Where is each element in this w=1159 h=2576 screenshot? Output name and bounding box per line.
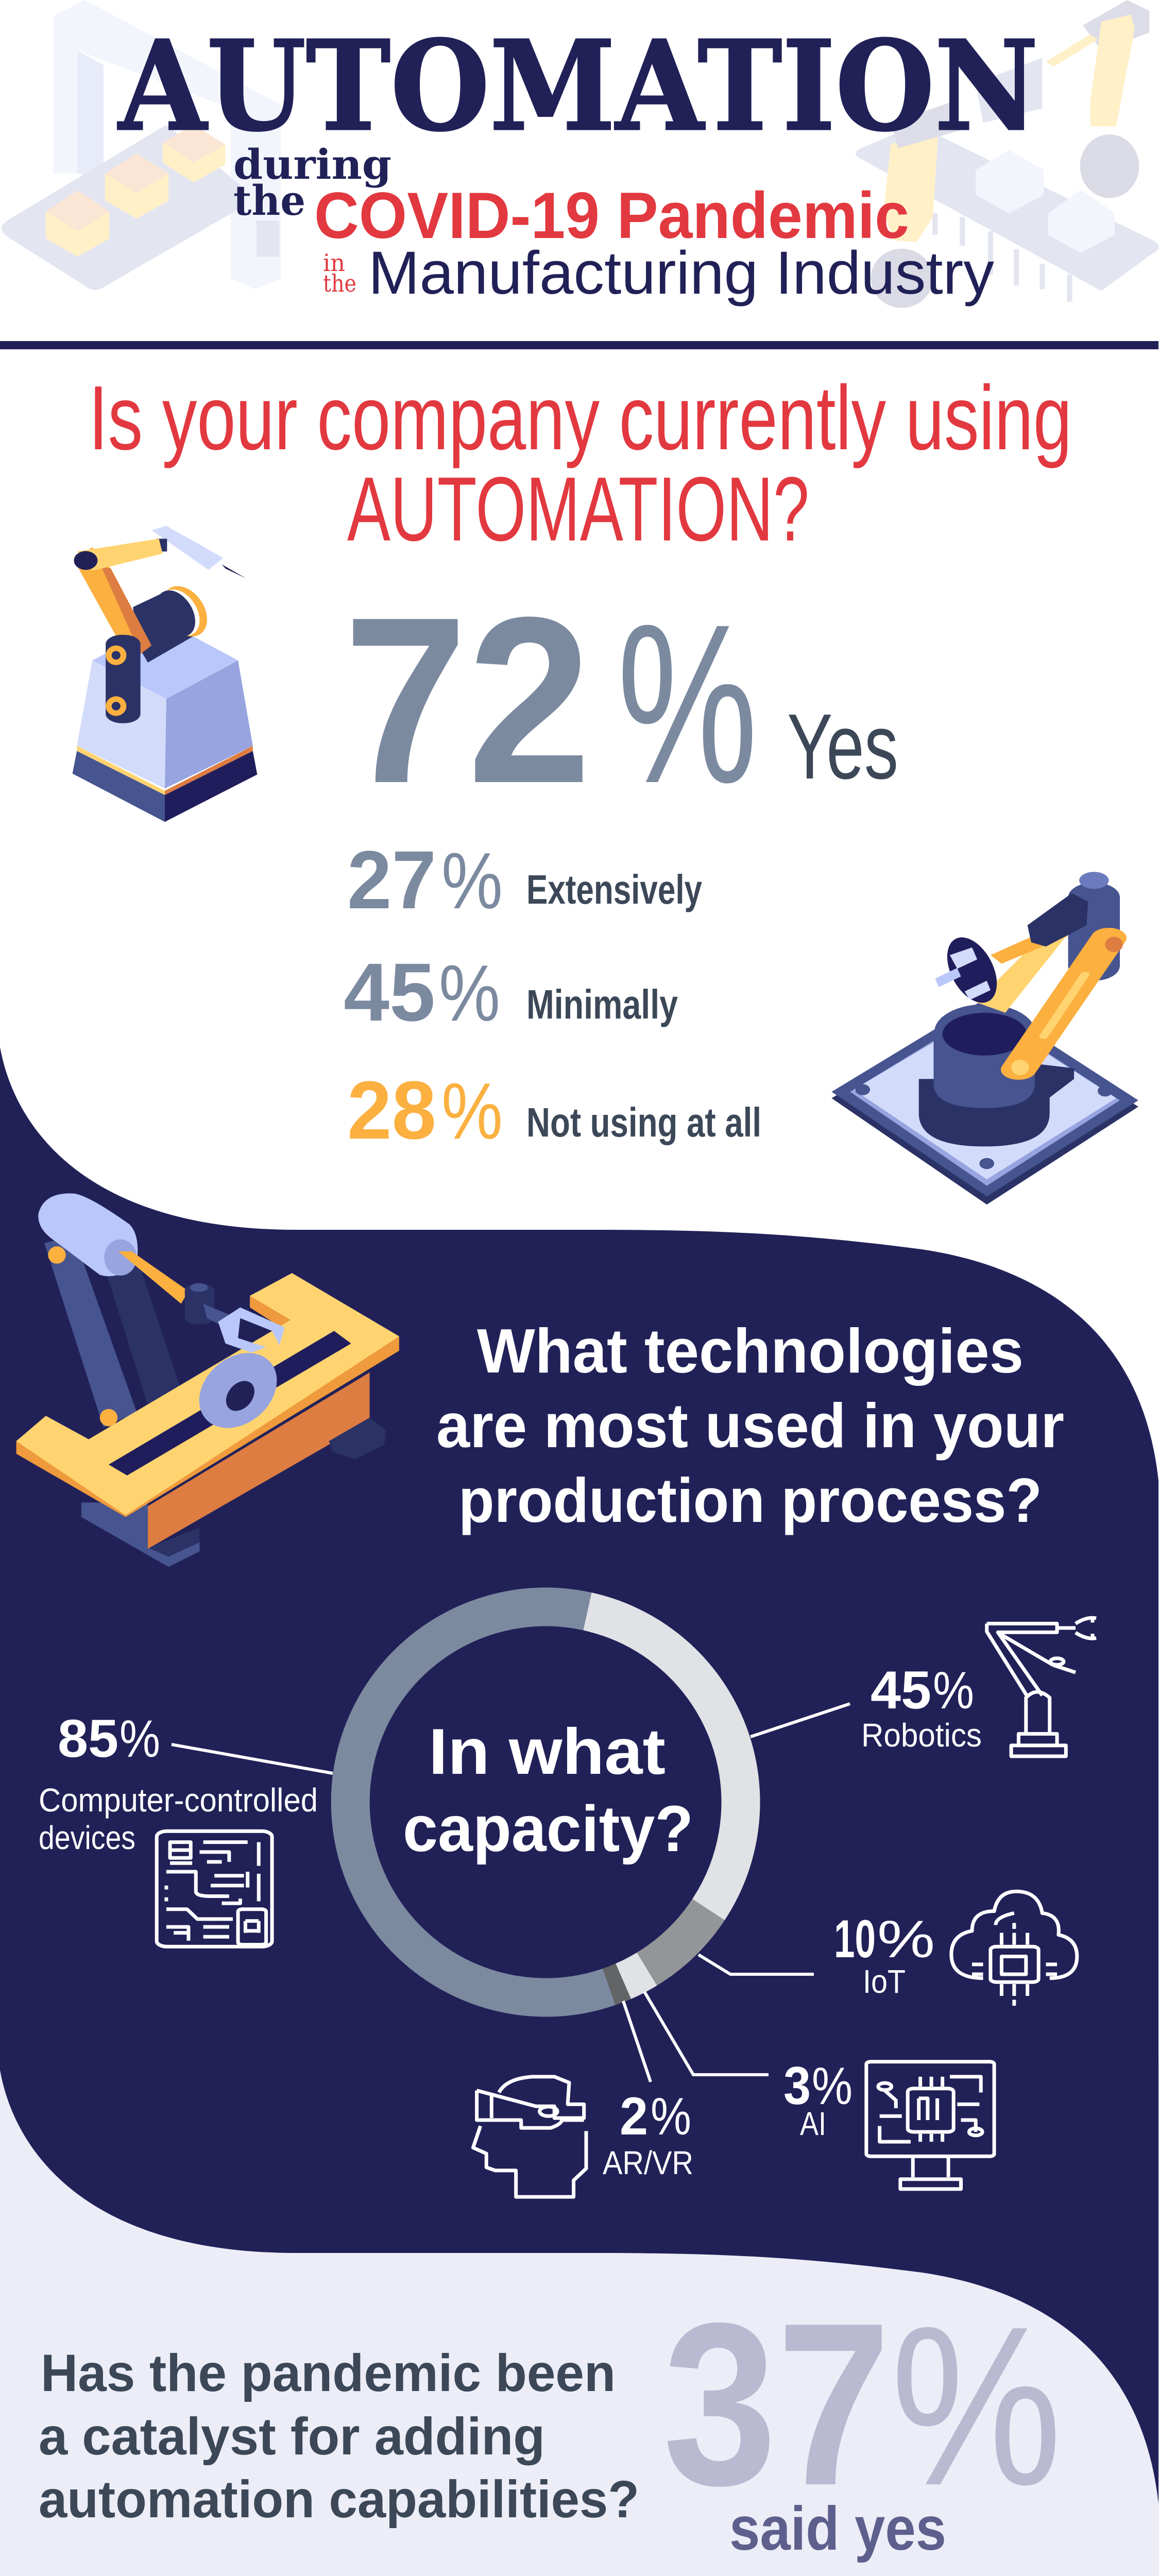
- donut center label: capacity?: [403, 1792, 693, 1865]
- subtitle: in the: the: [323, 269, 356, 297]
- stat: 28% not using: Not using at all: [526, 1099, 761, 1145]
- title: [117, 13, 1038, 307]
- callout: 2% AR/VR: AR/VR: [603, 2144, 693, 2181]
- question: using automation: [89, 367, 1072, 560]
- callout: 2% AR/VR: [603, 2001, 693, 2181]
- heading: technologies question: production process?: [458, 1465, 1042, 1535]
- donut center label: In what: [429, 1715, 666, 1788]
- stat: 27% extensively: 27: [347, 834, 436, 926]
- callout: 45% robotics: %: [933, 1661, 974, 1720]
- stat: 28% not using: %: [441, 1066, 503, 1156]
- stat: 72% yes: Yes: [787, 695, 898, 799]
- question: pandemic catalyst: automation capabilities?: [39, 2470, 639, 2529]
- callout: 85% computer-controlled devices: Computer-controlled: [39, 1782, 318, 1819]
- callout: 10% IoT: [698, 1909, 935, 2000]
- callout: 3% AI: %: [812, 2057, 853, 2115]
- stat: 72% yes: [344, 568, 898, 833]
- icon: VR headset head: [473, 2077, 586, 2197]
- icon: robotic arm: [987, 1618, 1096, 1756]
- icon: cloud chip: [951, 1891, 1077, 2006]
- stat: 27% extensively: %: [441, 836, 503, 925]
- stat: 72% yes: %: [617, 578, 758, 831]
- subtitle: during the: the: [233, 176, 305, 225]
- question: using automation: AUTOMATION?: [347, 458, 809, 560]
- stat: 45% minimally: [344, 946, 678, 1038]
- segment: robotics: [587, 1612, 741, 1910]
- callout: 85% computer-controlled devices: [39, 1709, 333, 1856]
- stat: 45% minimally: %: [439, 948, 500, 1038]
- question: pandemic catalyst: [39, 2344, 639, 2529]
- segment: IoT: [647, 1910, 708, 1969]
- subtitle: during the: during: [233, 140, 391, 189]
- callout: 10% IoT: %: [877, 1910, 935, 1969]
- donut chart: [350, 1607, 741, 1997]
- icon: robot arm on square plate: [831, 872, 1138, 1205]
- heading: technologies question: [436, 1316, 1064, 1535]
- header rule: [0, 341, 1158, 349]
- stat: 37% said yes: [663, 2275, 1062, 2563]
- icon: robot over table: [16, 1193, 399, 1567]
- subtitle: during the: [233, 140, 391, 225]
- donut center label: [403, 1715, 693, 1865]
- stat: 37% said yes: 37: [663, 2275, 891, 2534]
- callout: 45% robotics: Robotics: [861, 1717, 982, 1754]
- callout: 85% computer-controlled devices: devices: [39, 1819, 135, 1856]
- callout: 85% computer-controlled devices: %: [120, 1709, 160, 1768]
- subtitle: in the: [323, 249, 356, 297]
- question: pandemic catalyst: Has the pandemic been: [41, 2344, 616, 2402]
- navy wave section background: [0, 1047, 1158, 2504]
- stat: 37% said yes: said yes: [729, 2494, 946, 2563]
- subtitle: Manufacturing Industry: Manufacturing Industry: [368, 239, 994, 307]
- subtitle: COVID-19 Pandemic: COVID-19 Pandemic: [314, 179, 909, 252]
- heading: technologies question: are most used in your: [436, 1391, 1064, 1461]
- segment: AI: [623, 1969, 647, 1981]
- callout: 10% IoT: 10: [834, 1909, 876, 1969]
- callout: 45% robotics: [751, 1660, 982, 1754]
- stat: 37% said yes: %: [891, 2280, 1062, 2533]
- stat: 72% yes: 72: [344, 568, 591, 833]
- callout: 45% robotics: 45: [871, 1660, 931, 1720]
- stat: 27% extensively: [347, 834, 702, 926]
- title: AUTOMATION: [117, 13, 1038, 159]
- icon: AI monitor: [866, 2062, 994, 2189]
- stat: 28% not using: 28: [347, 1064, 436, 1156]
- callout: 2% AR/VR: %: [651, 2087, 691, 2146]
- callout: 10% IoT: IoT: [863, 1963, 906, 2000]
- stat: 45% minimally: Minimally: [526, 981, 678, 1027]
- callout: 2% AR/VR: 2: [620, 2087, 648, 2146]
- lower section background: [0, 2061, 1159, 2576]
- callout: 3% AI: 3: [783, 2056, 811, 2116]
- icon: circuit maze: [157, 1831, 272, 1946]
- question: pandemic catalyst: a catalyst for adding: [39, 2407, 545, 2466]
- heading: technologies question: What technologies: [477, 1316, 1024, 1386]
- callout: 3% AI: [644, 1992, 853, 2142]
- stat: 27% extensively: Extensively: [526, 867, 702, 912]
- subtitle: in the: in: [323, 249, 345, 277]
- callout: 85% computer-controlled devices: 85: [58, 1709, 118, 1769]
- segment: AR/VR: [609, 1981, 623, 1987]
- header illustration: faded conveyors and robot arms: [2, 0, 1158, 308]
- segment: computer-controlled devices: [350, 1607, 609, 1997]
- icon: robot arm on pedestal: [73, 526, 257, 822]
- callout: 3% AI: AI: [800, 2105, 826, 2142]
- stat: 45% minimally: 45: [344, 946, 435, 1038]
- stat: 28% not using: [347, 1064, 761, 1156]
